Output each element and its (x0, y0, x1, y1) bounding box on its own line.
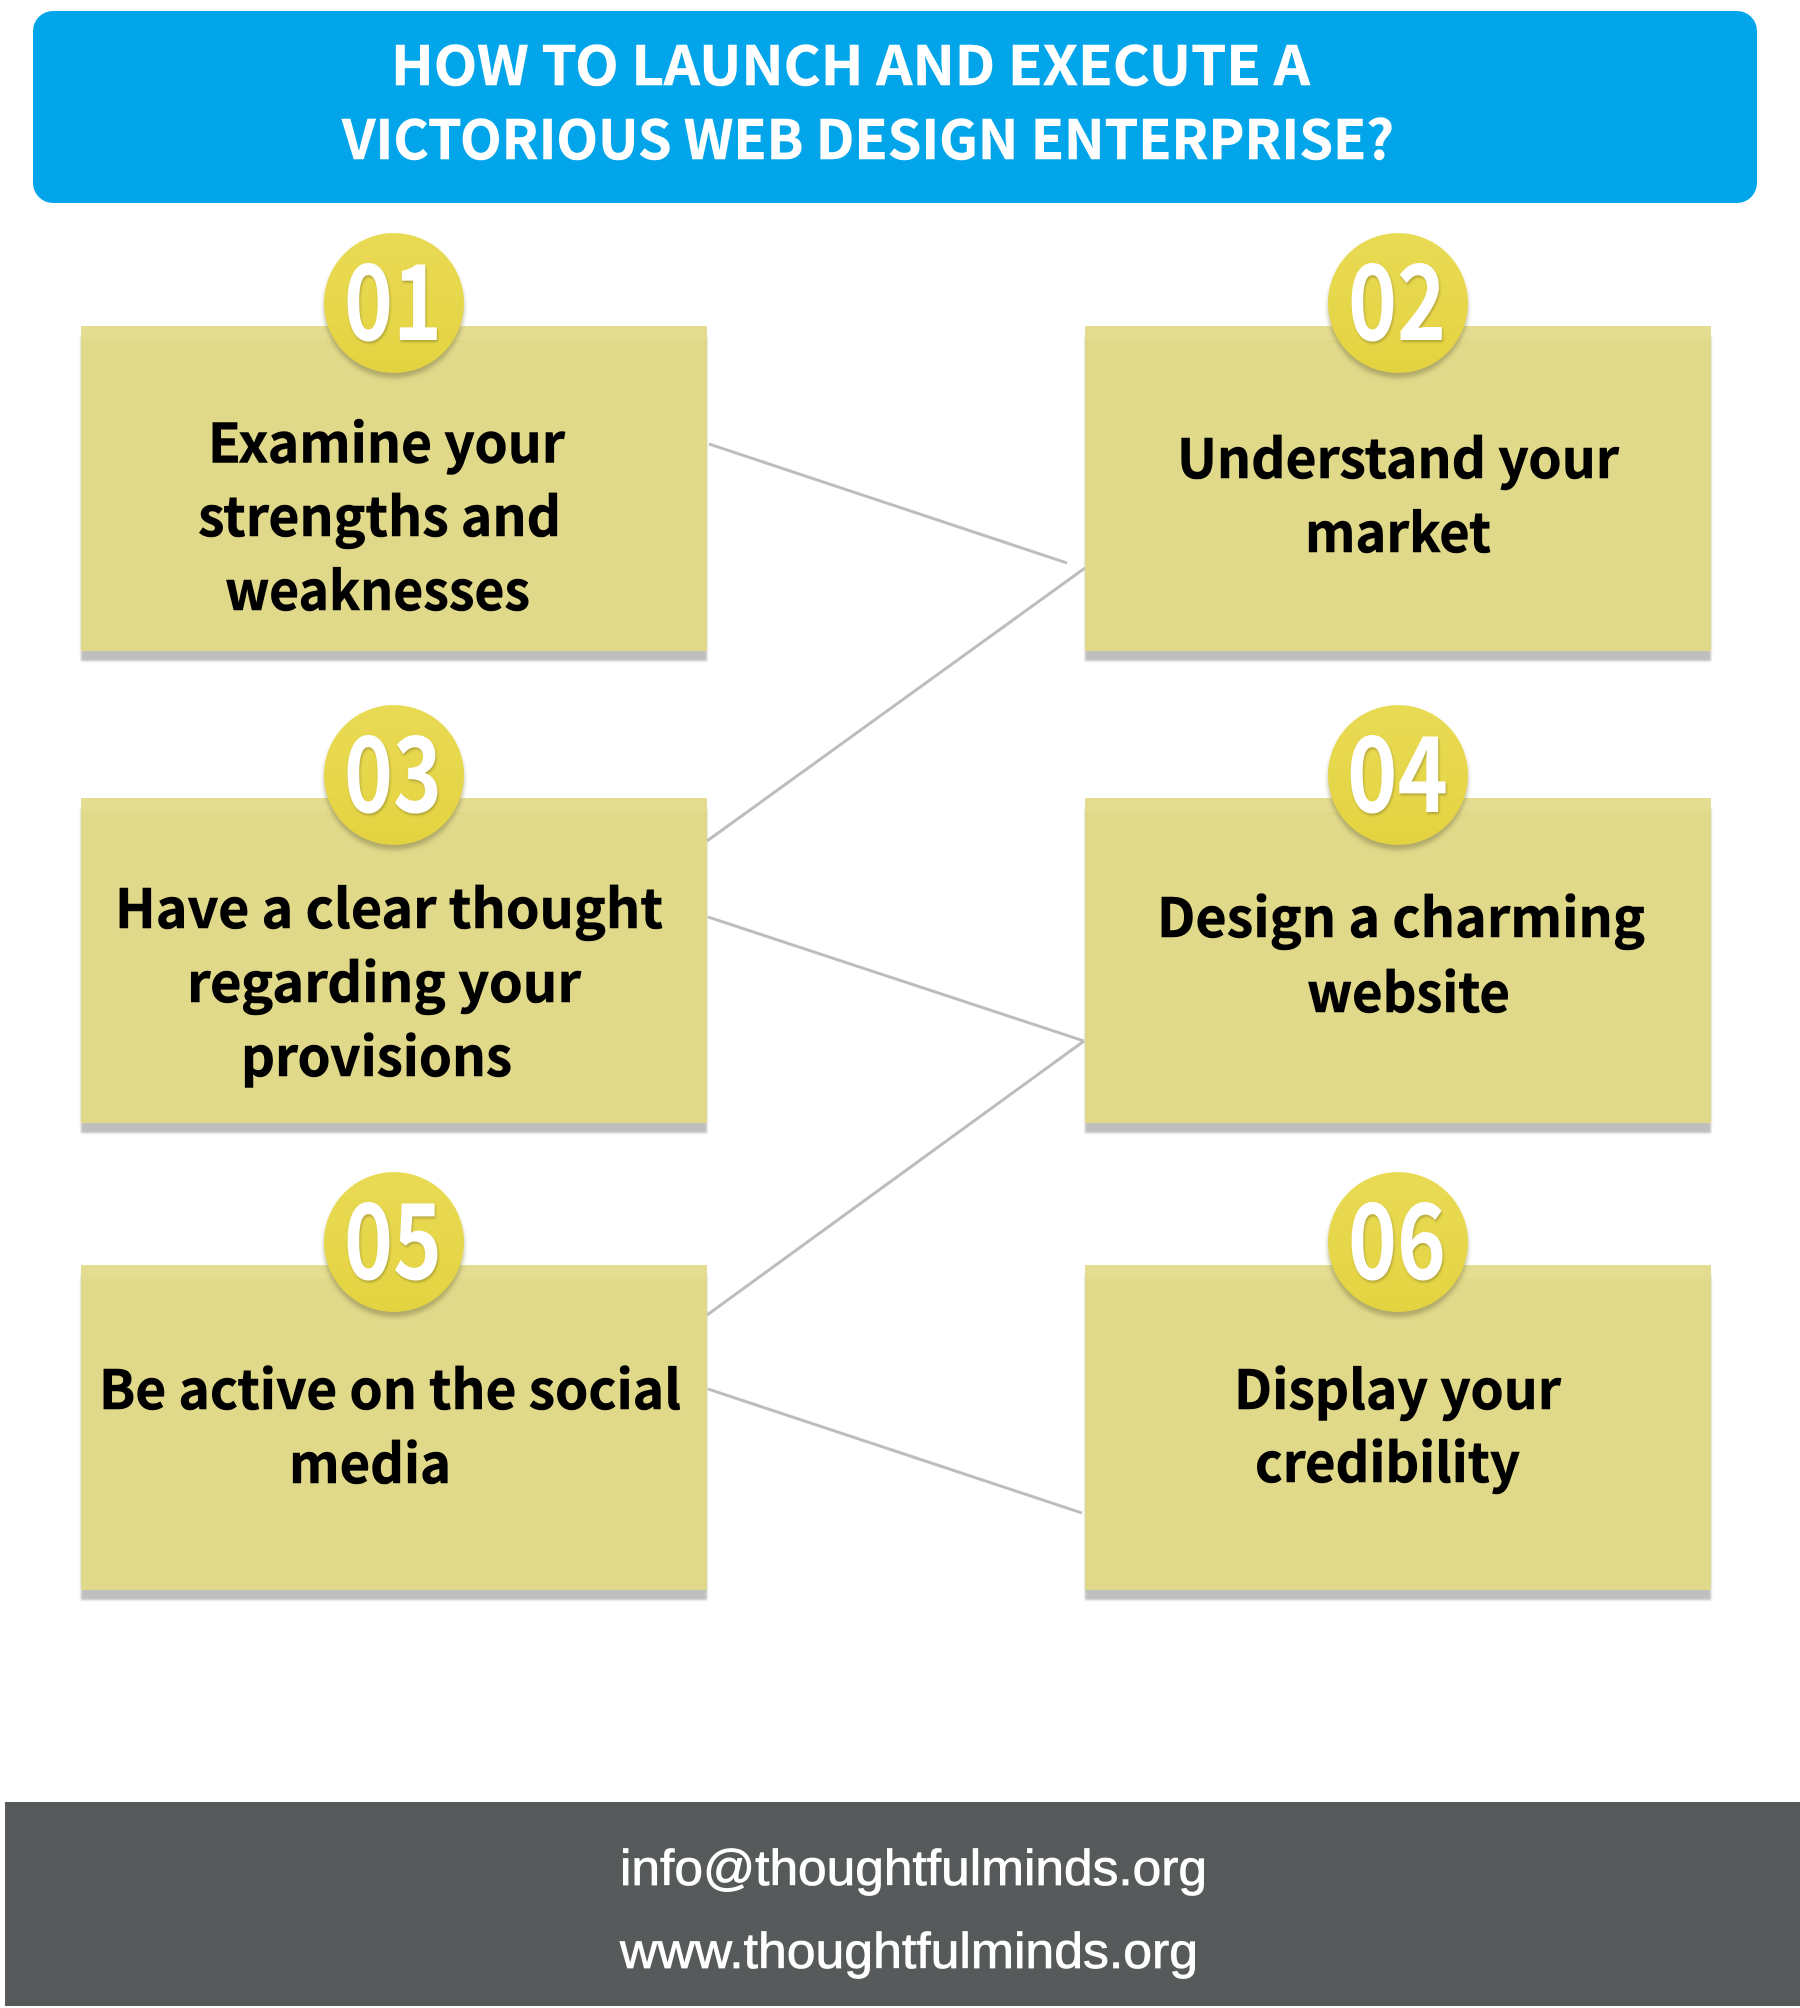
panel: step 05 (81, 1158, 707, 1600)
panel: step 03: regarding your (187, 939, 581, 1018)
title banner (33, 11, 1757, 203)
connector: 05 to 04 (707, 1041, 1084, 1315)
panel: step 05: media (289, 1420, 451, 1499)
panel: step 02 (1085, 219, 1711, 661)
panel: step 01 (81, 219, 707, 661)
panel: step 04 (1085, 691, 1711, 1133)
panel: step 06: Display your (1234, 1346, 1561, 1425)
footer contact bar: info@thoughtfulminds.org (620, 1840, 1207, 1896)
connector: 05 to 06 (708, 1389, 1082, 1513)
panel: step 06 (1085, 1158, 1711, 1600)
panel: step 05: 05 (344, 1158, 442, 1310)
panel: step 02: Understand your (1177, 415, 1619, 494)
panel: step 01: 01 (344, 219, 442, 371)
panel: step 03: provisions (241, 1013, 512, 1092)
panel: step 06: 06 (1348, 1158, 1446, 1310)
panel: step 06: credibility (1255, 1419, 1520, 1498)
title banner: VICTORIOUS WEB DESIGN ENTERPRISE? (341, 96, 1394, 175)
panel: step 03 (81, 691, 707, 1133)
panel: step 04: Design a charming (1157, 874, 1645, 953)
panel: step 02: market (1305, 489, 1491, 568)
connector: 03 to 04 (708, 917, 1084, 1041)
panel: step 05: Be active on the social (99, 1346, 681, 1425)
panel: step 01: strengths and (198, 473, 561, 552)
footer contact bar (5, 1802, 1800, 2006)
connector: 01 to 02 (709, 444, 1067, 563)
panel: step 04: 04 (1347, 691, 1448, 843)
panel: step 04: website (1307, 949, 1510, 1028)
title banner: HOW TO LAUNCH AND EXECUTE A (391, 22, 1310, 101)
panel: step 03: Have a clear thought (115, 865, 663, 944)
panel: step 02: 02 (1348, 219, 1446, 371)
panel: step 01: weaknesses (225, 547, 530, 626)
connector: 03 to 02 (707, 568, 1085, 841)
panel: step 03: 03 (344, 691, 442, 843)
footer contact bar: www.thoughtfulminds.org (619, 1923, 1198, 1979)
panel: step 01: Examine your (208, 400, 565, 478)
